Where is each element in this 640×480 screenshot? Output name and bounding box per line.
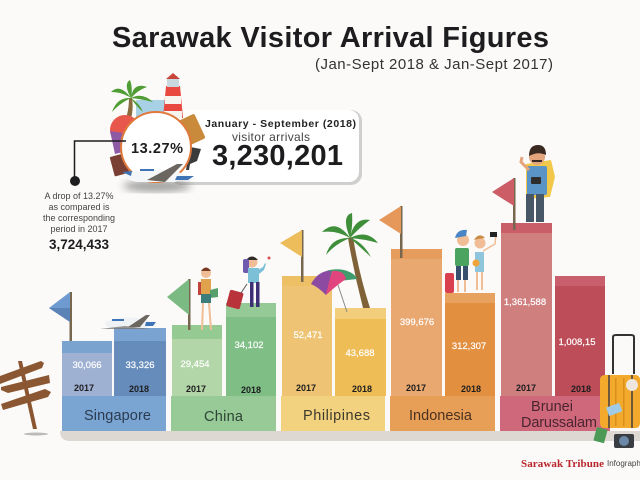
callout: 2018 total card: visitor arrivals (232, 130, 310, 144)
icon: travel collage with percentage: 13.27% (131, 141, 183, 157)
panel: Philippines (280, 213, 386, 431)
panel: Indonesia: Indonesia (409, 408, 473, 424)
icon: woman traveller (198, 268, 218, 330)
base platform (60, 431, 640, 441)
life ring, sail, suitcases (110, 115, 140, 145)
title: Sarawak Visitor Arrival Figures (112, 22, 549, 54)
panel: Brunei Darussalam: Darussalam (521, 415, 597, 431)
icon: signpost (0, 361, 51, 436)
flag (492, 178, 516, 230)
panel: Brunei Darussalam: 1,008,15 (559, 337, 595, 348)
panel: Singapore: Singapore (84, 408, 151, 424)
text block: drop note: A drop of 13.27% (44, 191, 114, 201)
panel: Philippines: 52,471 (293, 330, 323, 341)
panel: Philippines: Philipines (303, 408, 370, 424)
panel: China (167, 256, 276, 431)
panel: Singapore (49, 292, 166, 431)
panel: Brunei Darussalam: 2017 (516, 383, 536, 393)
flag (167, 279, 190, 330)
panel: Philippines: 2018 (352, 384, 372, 394)
icon: plane (100, 315, 156, 329)
flag (379, 206, 402, 258)
text block: drop note: 3,724,433 (49, 237, 110, 252)
palm (125, 98, 133, 122)
panel: China: China (204, 409, 244, 425)
panel: Singapore: 2018 (129, 384, 149, 394)
panel: Philippines: 2017 (296, 383, 316, 393)
panel: Brunei Darussalam: Brunei (531, 399, 573, 415)
icon: man with suitcase (226, 256, 270, 310)
callout: 2018 total card: 3,230,201 (212, 140, 343, 172)
connector line (70, 141, 126, 186)
icon: travel collage with percentage (110, 73, 206, 192)
icon: beach umbrella (311, 269, 357, 312)
logo: Sarawak Tribune Infographic credit: Sarawak Tribune (521, 458, 604, 470)
panel: Brunei Darussalam: 2018 (571, 384, 591, 394)
icon: yellow suitcase with camera and passport (593, 335, 640, 448)
text block: drop note: the corresponding (43, 213, 115, 223)
panel: Singapore: 33,326 (125, 360, 155, 371)
panel: Singapore: 2017 (74, 383, 94, 393)
panel: China: 34,102 (234, 340, 264, 351)
panel: Indonesia: 2017 (406, 383, 426, 393)
text block: drop note: as compared is (48, 202, 110, 212)
text block: drop note: period in 2017 (50, 224, 108, 234)
panel: China: 29,454 (180, 359, 210, 370)
percentage circle (121, 112, 191, 182)
panel: Philippines: 43,688 (345, 348, 375, 359)
callout: 2018 total card (170, 110, 362, 185)
panel: Brunei Darussalam: 1,361,588 (504, 297, 546, 308)
flag (49, 292, 72, 341)
subtitle: (Jan-Sept 2018 & Jan-Sept 2017) (315, 56, 553, 73)
panel: China: 2018 (241, 385, 261, 395)
map (136, 100, 168, 124)
callout: 2018 total card: January - September (2018) (205, 118, 356, 130)
icon: couple taking selfie (445, 230, 497, 293)
panel: Brunei Darussalam (492, 145, 610, 431)
logo: Sarawak Tribune Infographic credit (521, 458, 640, 470)
icon: palm tree (322, 213, 378, 308)
panel: Indonesia: 399,676 (400, 317, 434, 328)
flag (280, 230, 304, 282)
panel: Singapore: 30,066 (72, 360, 102, 371)
text block: drop note (43, 191, 115, 252)
icon: backpacker (521, 145, 555, 222)
panel: Indonesia (379, 206, 497, 431)
panel: China: 2017 (186, 384, 206, 394)
panel: Indonesia: 312,307 (452, 341, 486, 352)
lighthouse (163, 86, 183, 118)
plane (124, 169, 191, 182)
panel: Indonesia: 2018 (461, 384, 481, 394)
